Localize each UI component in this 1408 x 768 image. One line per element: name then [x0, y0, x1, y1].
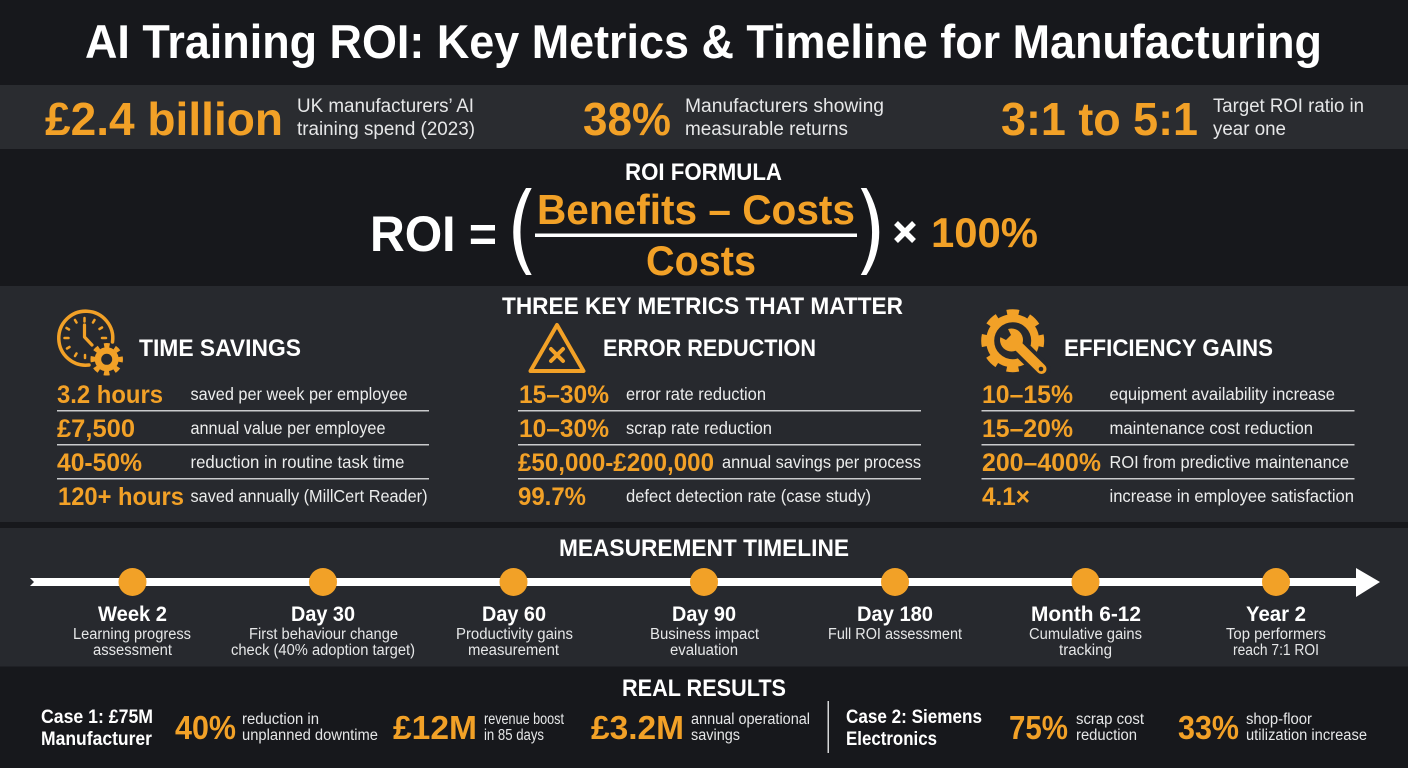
milestone: Day 180: Day 180 — [857, 603, 933, 626]
icon: clock with gear — [59, 311, 121, 373]
metric rows: increase in employee satisfaction — [1110, 486, 1354, 506]
milestone: Day 90: Day 90 — [672, 603, 736, 626]
metric rows: annual savings per process — [722, 452, 921, 472]
milestone: Day 30 — [231, 568, 415, 659]
panel: measurement timeline — [0, 528, 1408, 666]
column: efficiency gains — [982, 312, 1354, 511]
metric rows: saved annually (MillCert Reader) — [190, 486, 428, 506]
case 1 label: Case 1: £75M — [41, 707, 153, 728]
column: error reduction — [518, 325, 921, 511]
result: 75% scrap cost: scrap cost — [1076, 711, 1145, 728]
stat: measurable returns: Manufacturers showing — [685, 96, 884, 117]
milestone: Day 60 — [456, 568, 573, 659]
metric rows: 3.2 hours — [57, 381, 163, 409]
milestone: Day 30: Day 30 — [291, 603, 355, 626]
milestone: Day 60: Day 60 — [482, 603, 546, 626]
metric rows: maintenance cost reduction — [1110, 418, 1313, 438]
result: £12M revenue: in 85 days — [484, 727, 544, 744]
metric rows: error rate reduction — [626, 384, 766, 404]
case 2 label — [846, 707, 982, 750]
heading: error reduction: ERROR REDUCTION — [603, 335, 816, 362]
milestone: Day 60: Productivity gains — [456, 626, 573, 643]
column: time savings — [57, 311, 429, 511]
metric rows: £7,500 — [57, 415, 135, 443]
metric rows: 15–30% — [519, 381, 609, 409]
metric rows — [57, 381, 429, 511]
milestone: Year 2: Year 2 — [1246, 603, 1306, 626]
result: £3.2M savings: annual operational — [691, 711, 810, 728]
stat: UK spend: £2.4 billion — [45, 93, 283, 145]
result: 75% scrap cost: reduction — [1076, 727, 1137, 744]
result: 33% utilization — [1178, 709, 1367, 746]
milestone: Year 2: reach 7:1 ROI — [1233, 642, 1319, 659]
numerator: Benefits – Costs — [537, 186, 855, 233]
milestone: Week 2 — [73, 568, 191, 659]
formula heading: ROI FORMULA — [625, 159, 782, 186]
left parenthesis — [513, 188, 532, 275]
milestone: Day 30: First behaviour change — [249, 626, 398, 643]
stat: measurable returns: 38% — [583, 93, 671, 145]
metric rows: 10–15% — [982, 381, 1073, 409]
metric rows — [518, 381, 921, 511]
fraction bar — [535, 234, 857, 237]
heading: efficiency gains: EFFICIENCY GAINS — [1064, 335, 1273, 362]
metric rows — [982, 381, 1354, 511]
panel: three key metrics — [0, 286, 1408, 522]
milestone: Day 180 — [828, 568, 963, 643]
result: £12M revenue: £12M — [393, 709, 477, 746]
metric rows: annual value per employee — [190, 418, 386, 438]
result: £3.2M savings: savings — [691, 727, 740, 744]
milestone: Day 60: measurement — [468, 642, 560, 659]
stat: target ROI: Target ROI ratio in — [1213, 96, 1364, 117]
milestone: Month 6-12 — [1029, 568, 1142, 659]
milestone: Month 6-12: Month 6-12 — [1031, 603, 1141, 626]
stat: UK spend: UK manufacturers’ AI — [297, 96, 474, 117]
formula left side: ROI = — [370, 206, 497, 262]
milestone: Month 6-12: tracking — [1059, 642, 1112, 659]
result: 75% scrap cost — [1009, 709, 1145, 746]
denominator: Costs — [646, 237, 756, 284]
case 1 label — [41, 707, 153, 750]
result: 75% scrap cost: 75% — [1009, 709, 1068, 746]
result: £3.2M savings — [591, 709, 810, 746]
milestone: Year 2: Top performers — [1226, 626, 1326, 643]
milestone: Day 30: check (40% adoption target) — [231, 642, 415, 659]
icon: warning triangle with cross — [530, 325, 584, 371]
milestone: Week 2: Week 2 — [98, 603, 167, 626]
metric rows: reduction in routine task time — [190, 452, 404, 472]
milestone: Day 180: Full ROI assessment — [828, 626, 963, 643]
milestone: Day 90: Business impact — [650, 626, 760, 643]
result: 40% downtime: reduction in — [242, 711, 319, 728]
milestone: Year 2 — [1226, 568, 1326, 659]
stat: target ROI: 3:1 to 5:1 — [1001, 93, 1198, 145]
metrics heading: THREE KEY METRICS THAT MATTER — [502, 293, 903, 320]
panel: real results — [41, 675, 1367, 753]
stat: measurable returns — [583, 93, 884, 145]
metric rows: 40-50% — [57, 449, 142, 477]
metric rows: scrap rate reduction — [626, 418, 772, 438]
case 1 label: Manufacturer — [41, 729, 153, 750]
milestone: Day 90 — [650, 568, 760, 659]
milestone: Day 90: evaluation — [670, 642, 738, 659]
metric rows: saved per week per employee — [190, 384, 408, 404]
result: 33% utilization: shop-floor — [1246, 711, 1312, 728]
metric rows: 4.1× — [982, 483, 1030, 511]
case 2 label: Case 2: Siemens — [846, 707, 982, 728]
stat: target ROI — [1001, 93, 1364, 145]
case 2 label: Electronics — [846, 729, 937, 750]
result: £12M revenue — [393, 709, 565, 746]
arrow: timeline axis — [30, 568, 1380, 597]
percentage: 100% — [931, 209, 1038, 256]
metric rows: 10–30% — [519, 415, 609, 443]
icon: gear with wrench — [984, 312, 1043, 371]
metric rows: ROI from predictive maintenance — [1110, 452, 1349, 472]
panel: ROI formula — [370, 159, 1038, 284]
result: 40% downtime: 40% — [175, 709, 236, 746]
results heading: REAL RESULTS — [622, 675, 786, 702]
heading: time savings: TIME SAVINGS — [139, 335, 301, 362]
result: £12M revenue: revenue boost — [484, 711, 565, 728]
metric rows: 99.7% — [518, 483, 586, 511]
milestone: Week 2: assessment — [93, 642, 173, 659]
multiply sign — [896, 223, 914, 241]
metric rows: defect detection rate (case study) — [626, 486, 871, 506]
stat: target ROI: year one — [1213, 119, 1286, 140]
metric rows: equipment availability increase — [1110, 384, 1335, 404]
title: AI Training ROI: Key Metrics & Timeline for Manufacturing — [85, 15, 1322, 68]
result: £3.2M savings: £3.2M — [591, 709, 684, 746]
stat: UK spend: training spend (2023) — [297, 119, 475, 140]
metric rows: 120+ hours — [58, 483, 184, 511]
result: 40% downtime — [175, 709, 378, 746]
metric rows: £50,000-£200,000 — [518, 449, 714, 477]
result: 33% utilization: 33% — [1178, 709, 1239, 746]
panel: headline statistics — [0, 85, 1408, 149]
right parenthesis — [861, 188, 879, 275]
timeline heading: MEASUREMENT TIMELINE — [559, 535, 849, 562]
metric rows: 200–400% — [982, 449, 1101, 477]
milestone: Week 2: Learning progress — [73, 626, 191, 643]
result: 33% utilization: utilization increase — [1246, 727, 1367, 744]
metric rows: 15–20% — [982, 415, 1073, 443]
result: 40% downtime: unplanned downtime — [242, 727, 378, 744]
milestone: Month 6-12: Cumulative gains — [1029, 626, 1142, 643]
stat: measurable returns: measurable returns — [685, 119, 848, 140]
stat: UK spend — [45, 93, 475, 145]
